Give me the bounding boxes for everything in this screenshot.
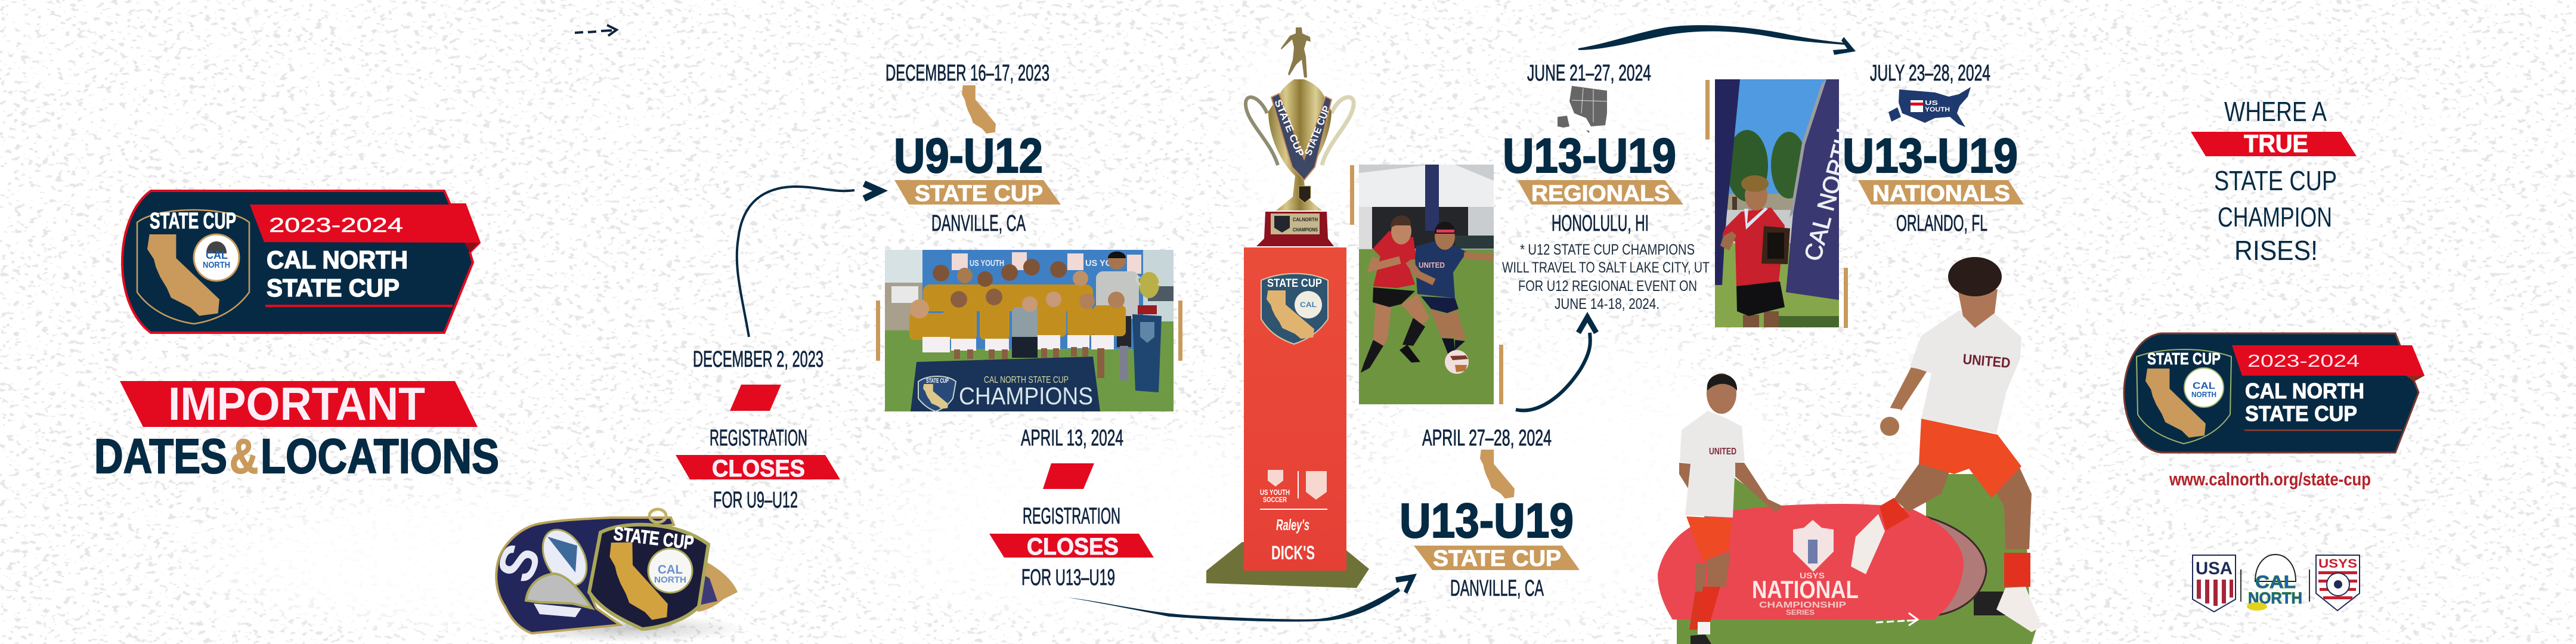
block: December 2 registration closes: DECEMBER 2, 2023 [693, 347, 823, 372]
block: U13-U19 Regionals: JUNE 21–27, 2024 [1527, 61, 1651, 86]
icon: USA soccer crest [2193, 555, 2236, 612]
champions banner: CAL NORTH STATE CUP [984, 375, 1069, 385]
block: U13-U19 State Cup: U13-U19 [1400, 494, 1574, 548]
pedestal State Cup shield [1261, 274, 1328, 344]
Cal North circle [194, 234, 239, 281]
pedestal State Cup shield: CAL [1300, 301, 1317, 309]
block: U13-U19 State Cup: DANVILLE, CA [1450, 576, 1544, 601]
pedestal State Cup shield: STATE CUP [1267, 277, 1322, 290]
accent bars: team photo [876, 301, 1182, 361]
sponsor logos: Raley's [1276, 516, 1309, 534]
left player: UNITED [1709, 447, 1736, 457]
California map [2145, 369, 2206, 438]
champions banner: CHAMPIONS [959, 382, 1093, 410]
U12 note: FOR U12 REGIONAL EVENT ON [1518, 278, 1697, 295]
block: U9-U12 State Cup [886, 61, 1061, 236]
block: U13-U19 State Cup: STATE CUP [1433, 546, 1561, 571]
grass base [1206, 542, 1369, 588]
USYS National banner [1658, 504, 1964, 620]
shield title: STATE CUP [2147, 349, 2221, 368]
tagline: STATE CUP [2214, 165, 2337, 196]
logo title [2244, 379, 2402, 431]
heading: Important Dates & Locations: DATES [94, 429, 227, 484]
tagline [2191, 96, 2357, 266]
block: U9-U12 State Cup: U9-U12 [894, 129, 1043, 183]
website link: www.calnorth.org/state-cup [2169, 469, 2371, 490]
block: April 13 registration closes [989, 426, 1154, 590]
photo: girls players [1359, 165, 1494, 404]
State Cup sash [1271, 94, 1333, 203]
U12 note: JUNE 14-18, 2024. [1555, 296, 1659, 312]
block: U9-U12 State Cup: DECEMBER 16–17, 2023 [886, 61, 1049, 86]
red player [1361, 215, 1429, 373]
block: U13-U19 Regionals: U13-U19 [1503, 129, 1676, 183]
separators between partner logos [2240, 569, 2310, 602]
shield [137, 210, 249, 324]
tagline: WHERE A [2224, 96, 2327, 127]
grass [1677, 474, 2039, 644]
logo title [265, 246, 453, 307]
blue player: UNITED [1419, 261, 1445, 270]
USYS National banner: SERIES [1786, 608, 1815, 617]
western region map [1558, 86, 1607, 133]
trophy cup [1268, 79, 1332, 210]
right player jumping [1851, 257, 2042, 632]
block: U13-U19 Nationals: U13-U19 [1843, 129, 2018, 183]
block: December 2 registration closes: CLOSES [712, 456, 805, 482]
block: April 13 registration closes: APRIL 13, 2024 [1021, 426, 1123, 451]
trophy plinth: CALNORTH [1293, 217, 1318, 222]
USYS National banner: USYS [1800, 571, 1825, 580]
U12 note [1502, 242, 1710, 312]
Cal North circle: CAL [2193, 381, 2215, 391]
shield title: STATE CUP [150, 209, 236, 234]
logo title: CAL NORTH [267, 246, 408, 274]
block: December 2 registration closes [676, 347, 840, 513]
back row players [923, 284, 1093, 311]
medal with ribbon [485, 509, 745, 643]
sponsor logos: SOCCER [1263, 496, 1287, 504]
arrow: State Cup to Regionals [1516, 317, 1596, 410]
neck ribbon [496, 518, 674, 633]
logo title: STATE CUP [267, 274, 400, 302]
shield [2137, 349, 2231, 444]
medal with ribbon: S [485, 535, 553, 590]
block: U13-U19 Nationals: NATIONALS [1872, 181, 2010, 206]
season ribbon [250, 205, 479, 252]
coach [1096, 252, 1139, 380]
California map [147, 234, 219, 316]
accent bars: boy photo [1705, 80, 1848, 328]
sponsor backdrop: US YO [1085, 258, 1112, 268]
accent bars: girls photo [1350, 165, 1503, 404]
block: December 2 registration closes: FOR U9–U12 [713, 488, 798, 513]
block: U13-U19 Regionals [1502, 61, 1710, 312]
badge: Cal North State Cup logo left [122, 191, 479, 333]
trophy handles [1246, 97, 1354, 165]
block: December 2 registration closes: REGISTRATION [710, 426, 807, 451]
arrow: registration to U13-U19 State Cup [1067, 574, 1417, 622]
U12 note: * U12 STATE CUP CHAMPIONS [1520, 242, 1695, 258]
photo: boy with plaque: CAL NORTH [1800, 126, 1859, 264]
Cal North circle: NORTH [203, 260, 230, 270]
sponsor logos: DICK'S [1271, 542, 1315, 564]
ribbon logo oval [534, 522, 596, 593]
medal with ribbon: CAL [658, 563, 683, 577]
trophy plinth [1256, 212, 1334, 246]
trophy and pedestal in photo [1132, 272, 1162, 392]
champions banner: STATE CUP [926, 377, 949, 385]
trophy plinth: CHAMPIONS [1293, 227, 1318, 233]
medal with ribbon: NORTH [654, 575, 686, 585]
block: April 13 registration closes: FOR U13–U19 [1021, 565, 1115, 590]
block: U13-U19 Nationals [1843, 61, 2024, 236]
arrow: Regionals to Nationals [1578, 25, 1856, 55]
season ribbon [2232, 345, 2425, 382]
ring [649, 509, 666, 522]
icon: USYS crest [2316, 555, 2360, 611]
California icon [962, 85, 996, 134]
sponsor backdrop [922, 250, 1143, 349]
block: April 13 registration closes: REGISTRATION [1023, 504, 1120, 529]
Cal North circle: NORTH [2191, 390, 2216, 399]
players cutout photo with USYS banner [1658, 257, 2042, 644]
popup banner back [1914, 514, 1986, 615]
heading: Important Dates & Locations: IMPORTANT [168, 377, 425, 430]
block: U13-U19 Regionals: HONOLULU, HI [1552, 211, 1649, 236]
dashed arrow on grass [1876, 613, 1918, 626]
medal shield [589, 525, 708, 629]
Cal North circle: CAL [206, 249, 228, 262]
heading: Important Dates & Locations: LOCATIONS [261, 429, 499, 484]
sponsor backdrop: US YOUTH [970, 258, 1004, 268]
California icon [1480, 450, 1515, 499]
True banner [2191, 132, 2357, 156]
ribbon fold [526, 574, 592, 608]
sponsor logos [1260, 470, 1327, 564]
icon: Cal North logo: CAL [2255, 572, 2296, 592]
sponsor logos: US YOUTH [1260, 488, 1290, 497]
icon: Cal North logo [2247, 555, 2302, 611]
State Cup sash: STATE CUP [1272, 98, 1306, 158]
USYS National banner: CHAMPIONSHIP [1759, 600, 1846, 610]
arrow: registration to U9-U12 [737, 184, 880, 337]
photo: U12 champions team [885, 250, 1174, 411]
USA map with US Youth Soccer: US [1925, 100, 1938, 107]
blue player [1408, 222, 1494, 357]
dashed arrow top left [575, 25, 617, 36]
block: April 13 registration closes: CLOSES [1027, 534, 1119, 560]
heading: Important Dates & Locations [94, 377, 499, 484]
front row players [909, 305, 1126, 340]
tagline: CHAMPION [2218, 202, 2332, 233]
tagline: RISES! [2234, 235, 2318, 266]
season ribbon: 2023-2024 [2247, 352, 2360, 371]
badge: Cal North State Cup logo right [2124, 333, 2425, 453]
block: U13-U19 Regionals: REGIONALS [1531, 181, 1670, 206]
left player [1679, 373, 1783, 644]
block: U9-U12 State Cup: STATE CUP [915, 181, 1043, 206]
tagline: TRUE [2244, 129, 2308, 157]
pedestal [1244, 247, 1346, 571]
block: U13-U19 Nationals: JULY 23–28, 2024 [1870, 61, 1990, 86]
right player jumping: UNITED [1962, 351, 2011, 371]
logo title: STATE CUP [2245, 401, 2357, 426]
champions banner [911, 357, 1100, 411]
trophy on pedestal [1206, 27, 1369, 588]
U12 note: WILL TRAVEL TO SALT LAKE CITY, UT [1502, 259, 1710, 276]
season ribbon: 2023-2024 [269, 214, 403, 237]
USYS National banner: NATIONAL [1752, 575, 1859, 603]
logo title: CAL NORTH [2245, 379, 2364, 403]
soccer ball [1445, 350, 1469, 374]
State Cup sash: STATE CUP [1302, 104, 1333, 157]
heading: Important Dates & Locations: & [230, 429, 258, 484]
icon: USA soccer crest: USA [2196, 559, 2233, 578]
block: U13-U19 State Cup: APRIL 27–28, 2024 [1422, 426, 1552, 451]
USA map with US Youth Soccer [1888, 87, 1971, 127]
trophy figure [1281, 27, 1311, 78]
block: U9-U12 State Cup: DANVILLE, CA [931, 211, 1026, 236]
block: U13-U19 Nationals: ORLANDO, FL [1896, 211, 1987, 236]
USA map with US Youth Soccer: YOUTH [1925, 106, 1950, 113]
icon: USYS crest: USYS [2318, 557, 2357, 571]
block: U13-U19 State Cup [1400, 426, 1580, 601]
icon: Cal North logo: NORTH [2248, 589, 2302, 607]
Cal North circle [2184, 368, 2224, 407]
medal with ribbon: STATE CUP [612, 522, 695, 553]
photo: boy with plaque [1715, 79, 1859, 327]
gold ribbon tassel [695, 561, 738, 612]
